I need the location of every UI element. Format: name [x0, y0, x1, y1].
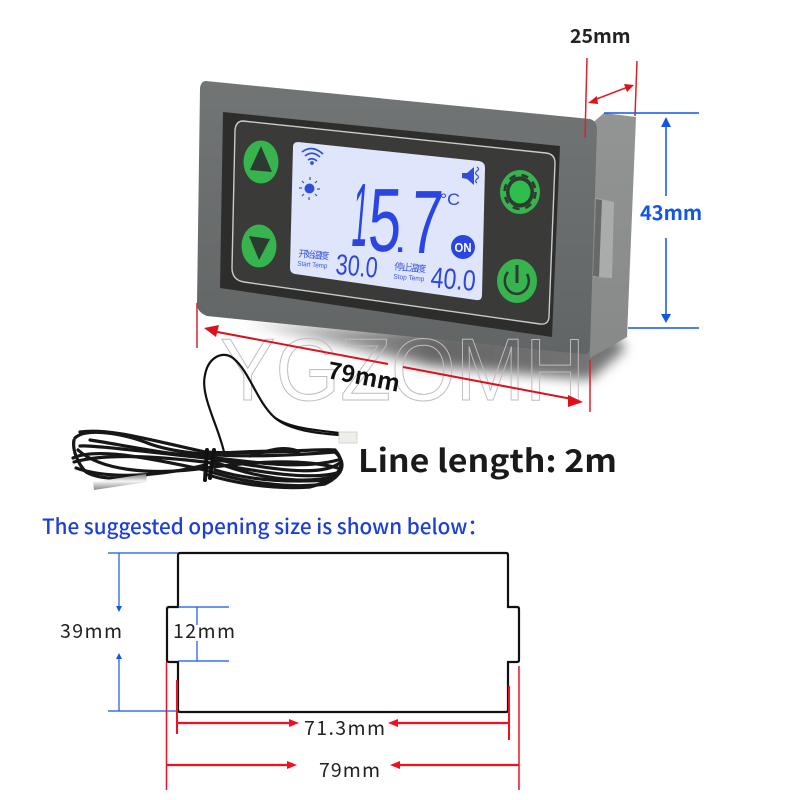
button: up [244, 140, 278, 184]
main temperature reading [348, 165, 446, 273]
label: 25mm: 25mm [570, 20, 631, 49]
start temp label: 开始温度 [298, 248, 330, 262]
main temperature reading: 5 [366, 170, 404, 271]
main temperature reading: 1 [348, 165, 373, 266]
device front face [197, 81, 597, 354]
ON badge: ON [454, 240, 472, 255]
label: 79mm: 79mm [325, 351, 403, 399]
opening size heading: The suggested opening size is shown below： [42, 511, 488, 541]
cable length label: Line length: 2m [358, 436, 617, 481]
cable loop to connector [204, 355, 339, 452]
dimension: height 43mm [604, 113, 702, 328]
stop temp label: Stop Temp [393, 274, 425, 283]
connector [339, 432, 357, 443]
label: 39mm: 39mm [60, 615, 122, 644]
button: settings gear [500, 170, 540, 214]
dark recess [220, 112, 560, 337]
metal probe tip [93, 474, 147, 490]
stop temp label [393, 261, 427, 283]
start temp value: 30.0 [334, 249, 379, 285]
coiled cable [73, 431, 342, 488]
side clip [593, 198, 614, 278]
device side wall [590, 113, 636, 358]
dimension: width 79mm [197, 303, 590, 412]
cable ties [205, 450, 214, 480]
device shadow [240, 322, 625, 380]
LCD screen [290, 142, 485, 300]
button: power [497, 259, 537, 303]
dimension: opening height 39mm [60, 553, 178, 711]
button: down [242, 224, 276, 268]
dimension: inner width 71.3mm [177, 680, 509, 741]
panel outline [232, 121, 555, 324]
temperature probe cable [73, 355, 357, 488]
start temp label [297, 248, 330, 270]
label: 71.3mm: 71.3mm [304, 712, 385, 741]
watermark: YGZOMH [220, 320, 585, 419]
stop temp label: 停止温度 [394, 261, 427, 275]
label: 12mm: 12mm [173, 615, 235, 644]
opening outline [167, 553, 519, 712]
label: 43mm: 43mm [640, 197, 702, 226]
icon: speaker [462, 167, 478, 185]
dimension: notch height 12mm [173, 607, 235, 661]
dimension: depth 25mm [570, 20, 637, 138]
dimension: outer width 79mm [166, 662, 519, 790]
degree unit: °C [440, 190, 460, 209]
label: 79mm: 79mm [319, 754, 380, 783]
main temperature reading: 7 [408, 172, 446, 273]
icon: wifi [302, 148, 323, 164]
icon: sun [299, 177, 320, 200]
start temp label: Start Temp [297, 261, 328, 270]
ON badge [451, 235, 475, 259]
thermostat device [197, 81, 636, 358]
main temperature reading: . [394, 213, 406, 262]
stop temp value: 40.0 [429, 262, 477, 298]
